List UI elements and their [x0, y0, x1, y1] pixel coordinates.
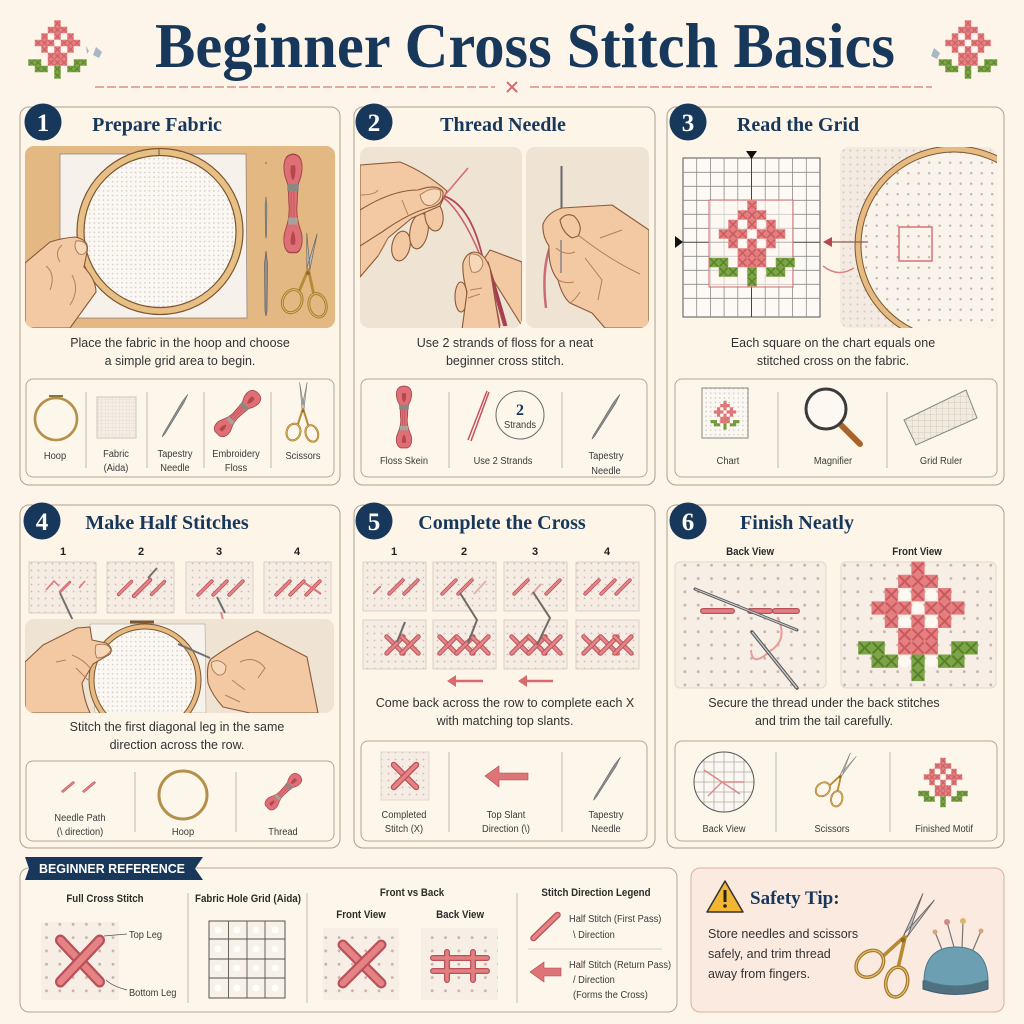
icon: tapestry needle: [591, 394, 621, 440]
section: full cross stitch: Bottom Leg: [129, 988, 176, 999]
labels: Grid Ruler: [920, 456, 963, 467]
caption: with matching top slants.: [436, 714, 573, 728]
icon: flower right: [931, 20, 997, 79]
heading: Thread Needle: [440, 114, 566, 136]
section: full cross stitch: [41, 894, 176, 1000]
title divider: [95, 82, 932, 92]
swatch 3: [186, 562, 253, 632]
section: front vs back: Back View: [436, 910, 485, 921]
heading: Safety Tip:: [750, 888, 840, 909]
panel: step 3 read the grid: [667, 104, 1024, 485]
labels: Direction (\): [482, 824, 530, 835]
tool box: [675, 741, 997, 841]
return arrows: [447, 675, 553, 687]
labels: Hoop: [172, 827, 195, 838]
tool box: [675, 379, 997, 477]
labels: Thread: [268, 827, 298, 838]
badge 4: [24, 502, 60, 540]
labels: (\ direction): [57, 827, 103, 838]
labels: Floss: [225, 463, 247, 474]
swatch 1: [29, 562, 96, 625]
labels: Tapestry: [588, 451, 624, 462]
labels: [382, 810, 624, 835]
heading: Read the Grid: [737, 114, 859, 136]
heading: Make Half Stitches: [85, 512, 249, 534]
icon: chart: [702, 388, 748, 438]
chart grid: [675, 151, 820, 317]
section: full cross stitch: Top Leg: [129, 930, 162, 941]
labels: Finished Motif: [915, 824, 973, 835]
tool box: [361, 379, 647, 477]
icon: fabric: [97, 397, 136, 438]
icon: grid ruler: [904, 390, 977, 445]
labels: Tapestry: [588, 810, 624, 821]
icon: two strands: 2: [516, 402, 524, 419]
badge 6: 6: [682, 509, 694, 536]
title: Beginner Cross Stitch Basics: [155, 10, 895, 81]
labels: Scissors: [814, 824, 850, 835]
icon: thread: [263, 771, 304, 812]
heading: Finish Neatly: [740, 512, 854, 534]
heading: Prepare Fabric: [92, 114, 222, 136]
caption: Use 2 strands of floss for a neat: [417, 336, 594, 350]
badge 2: [356, 104, 392, 140]
icon: scissors: [846, 880, 955, 1005]
illustration: threading left: [360, 147, 522, 330]
labels: Use 2 Strands: [474, 456, 532, 467]
labels: Scissors: [285, 451, 321, 462]
labels: [54, 813, 298, 838]
badge 4: 4: [36, 509, 49, 536]
step numbers: 4: [294, 546, 301, 558]
labels: [44, 449, 321, 474]
icon: flower left: [28, 20, 102, 79]
swatch 2: [107, 562, 174, 613]
badge 3: 3: [682, 110, 694, 137]
section: stitch direction legend: Stitch Direction Legend: [541, 888, 651, 899]
step numbers: 4: [604, 546, 611, 558]
section: stitch direction legend: (Forms the Cross): [573, 990, 648, 1001]
labels: Chart: [717, 456, 740, 467]
caption: Come back across the row to complete each X: [376, 696, 635, 710]
badge 1: 1: [37, 110, 49, 137]
view labels: Front View: [892, 547, 943, 558]
icon: magnifier: [806, 389, 860, 444]
tool box: [361, 741, 647, 841]
caption: Place the fabric in the hoop and choose: [70, 336, 290, 350]
step numbers: [60, 546, 301, 558]
step numbers: 1: [60, 546, 66, 558]
icon: tapestry needle: [592, 756, 621, 801]
labels: Back View: [702, 824, 746, 835]
tip text: away from fingers.: [708, 967, 810, 981]
labels: Needle: [591, 824, 621, 835]
labels: [717, 456, 963, 467]
icon: pin cushion: [923, 918, 988, 994]
section: stitch direction legend: [528, 888, 671, 1001]
labels: (Aida): [104, 463, 128, 474]
icon: back view: [694, 752, 754, 812]
step numbers: 3: [216, 546, 222, 558]
caption: beginner cross stitch.: [446, 354, 564, 368]
labels: Fabric: [103, 449, 129, 460]
section: front vs back: [323, 888, 498, 1000]
labels: [380, 451, 624, 477]
section: stitch direction legend: Half Stitch (First Pass): [569, 914, 661, 925]
icon: hoop: [35, 396, 77, 440]
labels: Tapestry: [157, 449, 193, 460]
caption: and trim the tail carefully.: [755, 714, 893, 728]
icon: floss: [212, 387, 264, 439]
section: stitch direction legend: Half Stitch (Return Pass): [569, 960, 671, 971]
labels: [702, 824, 973, 835]
labels: Completed: [382, 810, 426, 821]
labels: Needle: [591, 466, 621, 477]
section: stitch direction legend: \ Direction: [573, 930, 615, 941]
labels: Top Slant: [487, 810, 526, 821]
labels: Needle Path: [54, 813, 106, 824]
icon: two strands: Strands: [504, 420, 536, 431]
badge 2: 2: [368, 110, 380, 137]
badge 6: [670, 502, 706, 540]
view labels: [726, 547, 943, 558]
badge 5: [356, 502, 392, 540]
icon: needle path: [63, 783, 94, 791]
section: full cross stitch: Full Cross Stitch: [66, 894, 144, 905]
icon: tapestry needle: [161, 394, 189, 438]
illustration: threading right: [526, 147, 649, 328]
panel: step 6 finish neatly: [667, 502, 1004, 848]
icon: warning: [707, 881, 743, 912]
heading: Complete the Cross: [418, 512, 586, 534]
section: stitch direction legend: / Direction: [573, 975, 615, 986]
panel: step 5 complete the cross: [354, 502, 655, 848]
icon: floss skein: [396, 386, 412, 448]
caption: Each square on the chart equals one: [731, 336, 935, 350]
banner: [25, 857, 203, 880]
tip text: Store needles and scissors: [708, 927, 858, 941]
view labels: Back View: [726, 547, 775, 558]
tool box: [26, 379, 334, 477]
caption: direction across the row.: [110, 738, 244, 752]
step numbers: [391, 546, 611, 558]
labels: Needle: [160, 463, 190, 474]
icon: completed stitch: [381, 752, 429, 800]
section: fabric hole grid: [195, 894, 301, 998]
illustration: stitching in hoop: [25, 619, 334, 713]
tool box: [26, 761, 334, 841]
badge 3: [670, 104, 706, 140]
badge 5: 5: [368, 509, 380, 536]
icon: hoop: [159, 771, 207, 819]
panel: step 4 half stitches: [20, 502, 340, 848]
illustration: hoop close-up: [840, 147, 997, 328]
step numbers: 3: [532, 546, 538, 558]
bottom row swatches: [363, 592, 639, 669]
labels: Stitch (X): [385, 824, 423, 835]
caption: stitched cross on the fabric.: [757, 354, 909, 368]
banner: BEGINNER REFERENCE: [39, 861, 185, 876]
icon: scissors: [284, 382, 320, 443]
icon: direction arrow: [485, 766, 528, 787]
illustration: hoop on fabric: [25, 146, 336, 328]
top row swatches: [363, 562, 639, 611]
section: fabric hole grid: Fabric Hole Grid (Aida): [195, 894, 301, 905]
labels: Floss Skein: [380, 456, 428, 467]
step numbers: 2: [461, 546, 467, 558]
arrows chart to fabric: [823, 237, 868, 273]
swatch 4: [264, 562, 331, 613]
caption: Stitch the first diagonal leg in the same: [70, 720, 284, 734]
caption: Secure the thread under the back stitches: [708, 696, 940, 710]
icon: two strands: [468, 391, 544, 441]
back view picture: [675, 562, 826, 688]
icon: scissors: [811, 746, 867, 810]
labels: Magnifier: [814, 456, 853, 467]
icon: finished motif: [918, 758, 968, 807]
panel: safety tip: [691, 868, 1004, 1012]
panel: step 2 thread needle: [354, 104, 655, 485]
section: front vs back: Front View: [336, 910, 387, 921]
labels: Hoop: [44, 451, 67, 462]
panel: beginner reference: [20, 857, 677, 1012]
step numbers: 2: [138, 546, 144, 558]
tip text: safely, and trim thread: [708, 947, 831, 961]
labels: Embroidery: [212, 449, 260, 460]
step numbers: 1: [391, 546, 397, 558]
badge 1: [24, 104, 62, 140]
section: front vs back: Front vs Back: [380, 888, 444, 899]
panel: step 1 prepare fabric: [20, 104, 340, 485]
caption: a simple grid area to begin.: [105, 354, 255, 368]
front view picture: [841, 561, 996, 688]
